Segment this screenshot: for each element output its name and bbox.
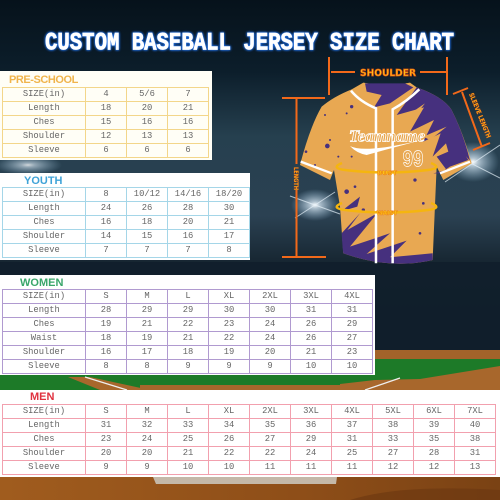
- table: pre-school sizes: Length: [28, 103, 60, 113]
- table: women sizes: 18: [183, 347, 193, 357]
- table: men sizes: 12: [388, 462, 398, 472]
- table: women sizes: 23: [224, 319, 234, 329]
- panel: men: [0, 390, 500, 477]
- table: women sizes: 22: [183, 319, 193, 329]
- table: women sizes: S: [103, 291, 109, 301]
- table: youth sizes: [2, 187, 250, 258]
- table: pre-school sizes: 18: [101, 103, 111, 113]
- table: youth sizes: 17: [224, 231, 234, 241]
- heading: men: MEN: [30, 391, 54, 403]
- table: men sizes: 34: [224, 420, 234, 430]
- table: pre-school sizes: 13: [183, 131, 193, 141]
- table: youth sizes: 7: [144, 245, 150, 255]
- table: women sizes: 29: [142, 305, 152, 315]
- table: men sizes: 10: [183, 462, 193, 472]
- table: women sizes: 19: [101, 319, 111, 329]
- heading: youth: YOUTH: [24, 175, 62, 187]
- table: pre-school sizes: 15: [101, 117, 111, 127]
- table: men sizes: 5XL: [385, 406, 401, 416]
- shoulder measure: [282, 57, 447, 98]
- jersey body: 99: [403, 146, 423, 172]
- shoulder measure: SHOULDER: [360, 68, 417, 79]
- table: men sizes: 9: [103, 462, 109, 472]
- table: women sizes: 24: [265, 319, 275, 329]
- table: women sizes: 19: [142, 333, 152, 343]
- table: youth sizes: 18: [142, 217, 152, 227]
- table: women sizes: 20: [265, 347, 275, 357]
- table: men sizes: 39: [429, 420, 439, 430]
- table: men sizes: XL: [224, 406, 234, 416]
- table: youth sizes: Ches: [33, 217, 55, 227]
- table: pre-school sizes: 7: [185, 89, 191, 99]
- table: women sizes: 26: [306, 319, 316, 329]
- panel: pre-school: [0, 71, 212, 160]
- waist measure: [337, 203, 436, 217]
- table: men sizes: 38: [388, 420, 398, 430]
- sleeve length measure: [453, 88, 493, 150]
- table: men sizes: 23: [101, 434, 111, 444]
- table: men sizes: 25: [183, 434, 193, 444]
- table: men sizes: 13: [470, 462, 480, 472]
- table: youth sizes: 15: [142, 231, 152, 241]
- table: men sizes: 24: [306, 448, 316, 458]
- table: men sizes: L: [185, 406, 191, 416]
- panel: youth: [0, 173, 250, 260]
- table: men sizes: 26: [224, 434, 234, 444]
- table: youth sizes: 26: [142, 203, 152, 213]
- table: pre-school sizes: [2, 87, 209, 158]
- table: pre-school sizes: 13: [142, 131, 152, 141]
- table: women sizes: 9: [226, 361, 232, 371]
- table: women sizes: XL: [224, 291, 234, 301]
- table: pre-school sizes: 20: [142, 103, 152, 113]
- table: women sizes: 28: [101, 305, 111, 315]
- table: men sizes: 37: [347, 420, 357, 430]
- table: women sizes: 21: [183, 333, 193, 343]
- table: youth sizes: 14: [101, 231, 111, 241]
- table: women sizes: L: [185, 291, 191, 301]
- table: men sizes: 9: [144, 462, 150, 472]
- table: men sizes: 35: [429, 434, 439, 444]
- table: pre-school sizes: 21: [183, 103, 193, 113]
- table: women sizes: 3XL: [303, 291, 319, 301]
- table: men sizes: 31: [470, 448, 480, 458]
- table: men sizes: 11: [306, 462, 316, 472]
- table: men sizes: 40: [470, 420, 480, 430]
- table: men sizes: 4XL: [344, 406, 360, 416]
- table: men sizes: 21: [183, 448, 193, 458]
- table: men sizes: 25: [347, 448, 357, 458]
- table: pre-school sizes: 4: [103, 89, 109, 99]
- table: women sizes: 8: [103, 361, 109, 371]
- table: youth sizes: 10/12: [134, 189, 160, 199]
- table: men sizes: Sleeve: [28, 462, 60, 472]
- table: women sizes: 18: [101, 333, 111, 343]
- table: men sizes: 2XL: [262, 406, 278, 416]
- table: women sizes: 16: [101, 347, 111, 357]
- table: women sizes: 19: [224, 347, 234, 357]
- table: men sizes: 22: [265, 448, 275, 458]
- table: women sizes: 10: [347, 361, 357, 371]
- table: pre-school sizes: SIZE(in): [23, 89, 65, 99]
- table: pre-school sizes: 16: [183, 117, 193, 127]
- table: youth sizes: SIZE(in): [23, 189, 65, 199]
- table: women sizes: 21: [142, 319, 152, 329]
- table: women sizes: [2, 289, 373, 374]
- table: men sizes: 38: [470, 434, 480, 444]
- bust measure: BUST: [377, 169, 398, 177]
- table: pre-school sizes: 12: [101, 131, 111, 141]
- table: women sizes: 17: [142, 347, 152, 357]
- table: women sizes: Waist: [31, 333, 57, 343]
- table: men sizes: 24: [142, 434, 152, 444]
- table: men sizes: Ches: [33, 434, 55, 444]
- heading: pre-school: PRE-SCHOOL: [9, 74, 78, 86]
- table: pre-school sizes: 16: [142, 117, 152, 127]
- table: women sizes: Ches: [33, 319, 55, 329]
- table: youth sizes: Sleeve: [28, 245, 60, 255]
- table: men sizes: 33: [388, 434, 398, 444]
- table: men sizes: 31: [347, 434, 357, 444]
- table: men sizes: 12: [429, 462, 439, 472]
- table: men sizes: SIZE(in): [23, 406, 65, 416]
- table: youth sizes: Length: [28, 203, 60, 213]
- table: men sizes: 6XL: [426, 406, 442, 416]
- length measure: LENGTH: [292, 167, 299, 190]
- table: youth sizes: 7: [185, 245, 191, 255]
- table: youth sizes: 21: [224, 217, 234, 227]
- table: youth sizes: 20: [183, 217, 193, 227]
- table: women sizes: 2XL: [262, 291, 278, 301]
- table: women sizes: 23: [347, 347, 357, 357]
- table: youth sizes: 16: [101, 217, 111, 227]
- table: youth sizes: Shoulder: [23, 231, 65, 241]
- table: women sizes: 9: [185, 361, 191, 371]
- table: men sizes: 33: [183, 420, 193, 430]
- table: pre-school sizes: 6: [185, 145, 191, 155]
- table: youth sizes: 28: [183, 203, 193, 213]
- table: men sizes: M: [144, 406, 150, 416]
- sleeve length measure: SLEEVE LENGTH: [467, 92, 493, 139]
- table: men sizes: 28: [429, 448, 439, 458]
- table: men sizes: 22: [224, 448, 234, 458]
- table: women sizes: 8: [144, 361, 150, 371]
- table: women sizes: SIZE(in): [23, 291, 65, 301]
- table: men sizes: 11: [265, 462, 275, 472]
- waist measure: WAIST: [376, 210, 398, 217]
- table: women sizes: Shoulder: [23, 347, 65, 357]
- table: men sizes: [2, 404, 496, 475]
- table: women sizes: 27: [347, 333, 357, 343]
- table: women sizes: 29: [347, 319, 357, 329]
- panel: women: [0, 275, 375, 375]
- table: men sizes: 7XL: [467, 406, 483, 416]
- table: women sizes: 30: [224, 305, 234, 315]
- table: youth sizes: 8: [226, 245, 232, 255]
- table: women sizes: Sleeve: [28, 361, 60, 371]
- jersey body: Teamname: [349, 127, 426, 146]
- table: pre-school sizes: 5/6: [139, 89, 155, 99]
- table: women sizes: 26: [306, 333, 316, 343]
- heading: women: WOMEN: [20, 277, 63, 289]
- table: women sizes: 31: [306, 305, 316, 315]
- table: youth sizes: 18/20: [216, 189, 242, 199]
- table: youth sizes: 7: [103, 245, 109, 255]
- table: women sizes: Length: [28, 305, 60, 315]
- table: pre-school sizes: 6: [103, 145, 109, 155]
- table: youth sizes: 8: [103, 189, 109, 199]
- table: pre-school sizes: Sleeve: [28, 145, 60, 155]
- table: youth sizes: 16: [183, 231, 193, 241]
- table: men sizes: 10: [224, 462, 234, 472]
- table: men sizes: 11: [347, 462, 357, 472]
- table: women sizes: 21: [306, 347, 316, 357]
- table: men sizes: 27: [265, 434, 275, 444]
- table: men sizes: 32: [142, 420, 152, 430]
- table: men sizes: Shoulder: [23, 448, 65, 458]
- bust measure: [337, 163, 436, 177]
- table: men sizes: S: [103, 406, 109, 416]
- table: women sizes: 22: [224, 333, 234, 343]
- table: women sizes: M: [144, 291, 150, 301]
- table: women sizes: 30: [265, 305, 275, 315]
- table: women sizes: 4XL: [344, 291, 360, 301]
- table: men sizes: 3XL: [303, 406, 319, 416]
- table: men sizes: 20: [101, 448, 111, 458]
- table: men sizes: 27: [388, 448, 398, 458]
- table: pre-school sizes: Ches: [33, 117, 55, 127]
- table: women sizes: 24: [265, 333, 275, 343]
- table: men sizes: 35: [265, 420, 275, 430]
- table: women sizes: 9: [267, 361, 273, 371]
- table: women sizes: 10: [306, 361, 316, 371]
- table: men sizes: 20: [142, 448, 152, 458]
- table: pre-school sizes: 6: [144, 145, 150, 155]
- table: men sizes: Length: [28, 420, 60, 430]
- table: men sizes: 29: [306, 434, 316, 444]
- table: men sizes: 36: [306, 420, 316, 430]
- table: women sizes: 29: [183, 305, 193, 315]
- table: youth sizes: 14/16: [175, 189, 201, 199]
- length measure: [282, 98, 326, 257]
- table: men sizes: 31: [101, 420, 111, 430]
- table: women sizes: 31: [347, 305, 357, 315]
- jersey body: [300, 83, 472, 264]
- table: youth sizes: 24: [101, 203, 111, 213]
- table: pre-school sizes: Shoulder: [23, 131, 65, 141]
- table: youth sizes: 30: [224, 203, 234, 213]
